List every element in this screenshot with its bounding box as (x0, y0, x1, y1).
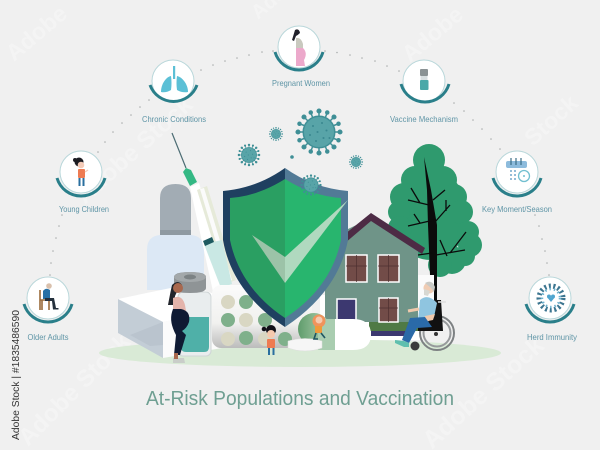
syringe (172, 133, 236, 296)
watermark: Adobe Stock (13, 328, 136, 450)
shield (223, 168, 348, 327)
big bottle (147, 184, 204, 290)
windows (346, 255, 399, 322)
icon: child (73, 158, 88, 186)
man in wheelchair (395, 282, 454, 350)
label: pregnant women: Pregnant Women (272, 78, 330, 88)
label: young children: Young Children (59, 204, 109, 214)
label: key moment/season: Key Moment/Season (482, 204, 552, 214)
watermark: Adobe (1, 0, 72, 66)
label: older adults: Older Adults (28, 332, 68, 342)
check mark (252, 235, 285, 283)
viruses (238, 109, 363, 195)
capsule, ball and pedestal (288, 313, 371, 351)
pill blister pack (212, 285, 312, 348)
pregnant woman figure (168, 282, 189, 363)
door (337, 299, 356, 321)
label: herd immunity: Herd Immunity (527, 332, 578, 342)
small child figure (262, 325, 276, 355)
watermark: Adobe (397, 1, 468, 67)
node: chronic conditions (142, 60, 206, 124)
ground ellipse (99, 339, 501, 367)
title: At-Risk Populations and Vaccination (146, 388, 454, 410)
node: vaccine mechanism (390, 60, 458, 124)
stock id side text: Adobe Stock | #1835486590 (10, 310, 22, 440)
icon: lungs (161, 66, 188, 92)
node: older adults (24, 277, 72, 342)
icon: pregnant woman (292, 29, 306, 66)
watermark: Stock (519, 89, 583, 151)
node: key moment / season (482, 151, 552, 214)
icon: calendar and clock (506, 158, 530, 182)
house (320, 213, 434, 340)
running girl with orange hair (312, 314, 326, 339)
node: young children (57, 151, 109, 214)
icon: vial (420, 69, 428, 90)
vial (174, 272, 211, 356)
icon: older adult on chair (40, 283, 58, 310)
watermark: Adobe Stock (71, 91, 199, 209)
label: vaccine mechanism: Vaccine Mechanism (390, 114, 458, 124)
node: pregnant women (272, 26, 330, 88)
label: chronic conditions: Chronic Conditions (142, 114, 206, 124)
tree (388, 144, 482, 300)
node: herd immunity (526, 277, 578, 342)
white box (118, 284, 240, 358)
icon: ring of people and heart (539, 286, 563, 310)
dotted arc connecting the groups (49, 50, 550, 276)
